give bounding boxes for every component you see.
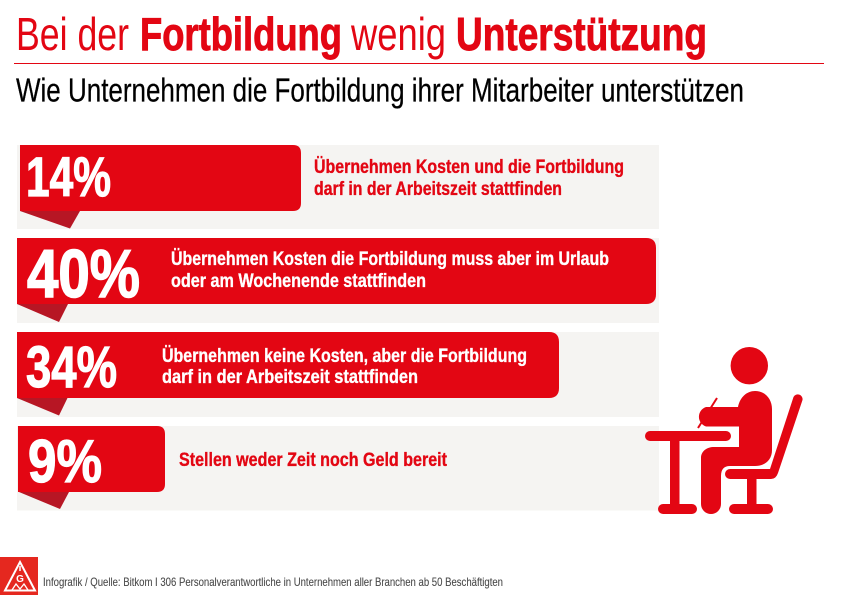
source note: Infografik / Quelle: Bitkom I 306 Personalverantwortliche in Unternehmen aller Branchen ab 50 Beschäftigten <box>43 575 503 589</box>
value: 34%: 34% <box>26 335 117 400</box>
description: 14%: darf in der Arbeitszeit stattfinden <box>314 179 562 200</box>
value: 9%: 9% <box>28 428 102 495</box>
value: 40%: 40% <box>27 236 140 312</box>
panel: 14 percent <box>17 145 659 229</box>
description: 14%: Übernehmen Kosten und die Fortbildung <box>314 157 624 178</box>
description: 40%: Übernehmen Kosten die Fortbildung muss aber im Urlaub <box>171 249 609 270</box>
title: wenig <box>350 8 446 60</box>
description: 34%: Übernehmen keine Kosten, aber die Fortbildung <box>162 346 527 367</box>
logo: IG Metall <box>0 557 38 595</box>
panel: 40 percent <box>17 236 659 323</box>
description: 40%: oder am Wochenende stattfinden <box>171 271 426 292</box>
title: Unterstützung <box>456 8 707 60</box>
value: 14%: 14% <box>26 145 111 208</box>
panel: 9 percent <box>17 426 659 510</box>
description: 9%: Stellen weder Zeit noch Geld bereit <box>179 450 448 471</box>
title: Fortbildung <box>140 8 342 60</box>
panel: 34 percent <box>17 332 659 417</box>
title <box>16 8 707 60</box>
logo: IG Metall: G <box>16 574 24 585</box>
description: 34%: darf in der Arbeitszeit stattfinden <box>162 367 418 388</box>
title: Bei der <box>16 8 129 60</box>
icon: person at desk <box>645 347 803 514</box>
